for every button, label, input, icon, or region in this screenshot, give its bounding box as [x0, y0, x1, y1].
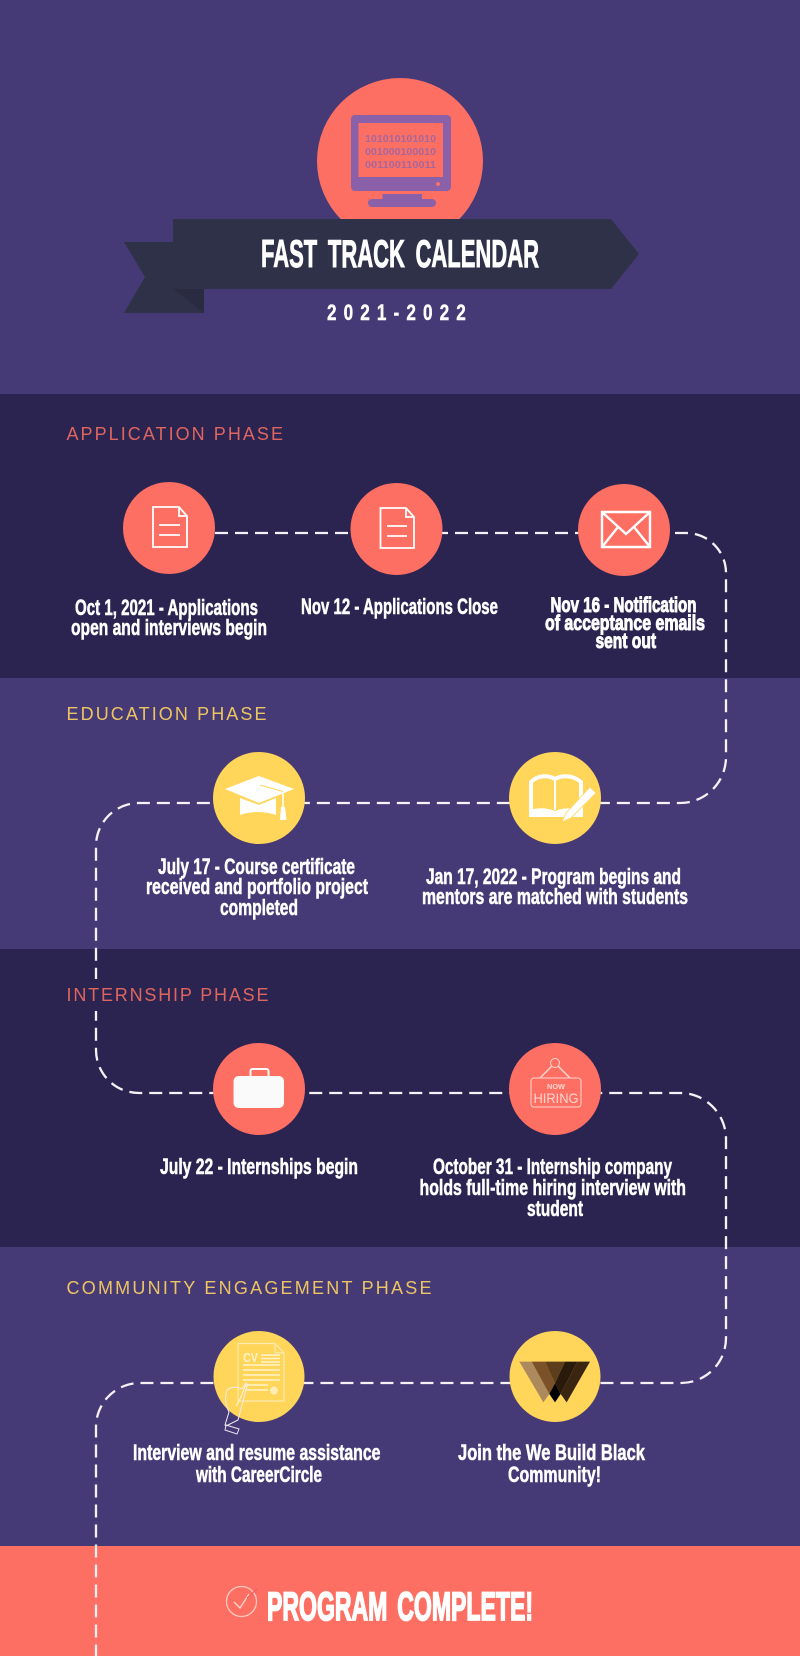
icon: computer monitor in coral circle: 001000100010 [365, 146, 436, 158]
heading: application phase: APPLICATION PHASE [66, 424, 283, 444]
text: October 31 hiring interview: October 31 - Internship company [433, 1154, 673, 1179]
text: October 31 hiring interview: holds full-time hiring interview with [420, 1175, 686, 1200]
text: July 17 course certificate [146, 854, 368, 920]
text: join the community [458, 1440, 646, 1487]
text: Nov 12 applications close: Nov 12 - Applications Close [301, 594, 498, 619]
text: join the community: Community! [508, 1462, 601, 1487]
icon: now hiring sign in coral circle [509, 1043, 601, 1135]
icon: check mark ring [226, 1586, 257, 1616]
icon: now hiring sign in coral circle: NOW [547, 1084, 565, 1091]
text: Oct 1 applications open: open and interviews begin [71, 615, 267, 640]
text: join the community: Join the We Build Black [458, 1440, 646, 1465]
text: July 17 course certificate: completed [220, 895, 298, 920]
text: Nov 16 notification: sent out [596, 629, 656, 653]
text: interview and resume assistance: with CareerCircle [195, 1462, 322, 1487]
text: July 17 course certificate: received and portfolio project [146, 874, 368, 899]
icon: envelope in coral circle [578, 484, 670, 576]
title ribbon [124, 219, 639, 313]
icon: document in coral circle [123, 482, 215, 574]
panel: program complete band [0, 1546, 800, 1656]
icon: open book and pencil in yellow circle [509, 752, 601, 844]
callout: program complete: PROGRAM COMPLETE! [267, 1585, 533, 1629]
heading: internship phase [66, 979, 268, 1011]
text: Jan 17 program begins: Jan 17, 2022 - Program begins and [426, 864, 681, 889]
text: Jan 17 program begins: mentors are matched with students [422, 884, 688, 909]
text: October 31 hiring interview [420, 1154, 686, 1221]
icon: CV and hand in yellow circle: CV [243, 1350, 258, 1365]
icon: We Build Black logo in yellow circle [510, 1331, 600, 1422]
dashed timeline path [96, 533, 726, 1656]
heading: community engagement phase: COMMUNITY ENGAGEMENT PHASE [66, 1278, 432, 1298]
icon: computer monitor in coral circle: 001100110011 [365, 159, 436, 171]
panel: community engagement phase background [0, 1247, 800, 1546]
text: October 31 hiring interview: student [527, 1196, 583, 1221]
text: Oct 1 applications open: Oct 1, 2021 - Applications [75, 595, 258, 620]
text: interview and resume assistance [133, 1440, 380, 1487]
heading: education phase: EDUCATION PHASE [66, 704, 266, 724]
text: July 22 internships begin: July 22 - Internships begin [160, 1154, 358, 1179]
panel: education phase background [0, 678, 800, 949]
text: interview and resume assistance: Interview and resume assistance [133, 1440, 380, 1465]
text: Nov 16 notification: of acceptance emails [545, 611, 705, 635]
text: Nov 16 notification: Nov 16 - Notification [550, 593, 696, 617]
icon: CV and hand in yellow circle [214, 1331, 304, 1434]
text: Nov 16 notification [545, 593, 705, 653]
text: July 17 course certificate: July 17 - Course certificate [158, 854, 355, 879]
icon: now hiring sign in coral circle: HIRING [534, 1090, 578, 1106]
icon: computer monitor in coral circle [317, 78, 483, 244]
text: Oct 1 applications open [71, 595, 267, 640]
heading: internship phase: INTERNSHIP PHASE [66, 985, 268, 1005]
panel: header background [0, 0, 800, 394]
panel: internship phase background [0, 949, 800, 1247]
text: Jan 17 program begins [422, 864, 688, 909]
panel: application phase background [0, 394, 800, 678]
icon: briefcase in coral circle [213, 1043, 305, 1135]
subtitle: year range: 2021-2022 [327, 301, 466, 326]
icon: graduation cap in yellow circle [213, 752, 305, 844]
icon: document in coral circle [350, 483, 442, 575]
title: FAST TRACK CALENDAR [261, 233, 539, 276]
icon: computer monitor in coral circle: 101010101010 [365, 133, 436, 145]
